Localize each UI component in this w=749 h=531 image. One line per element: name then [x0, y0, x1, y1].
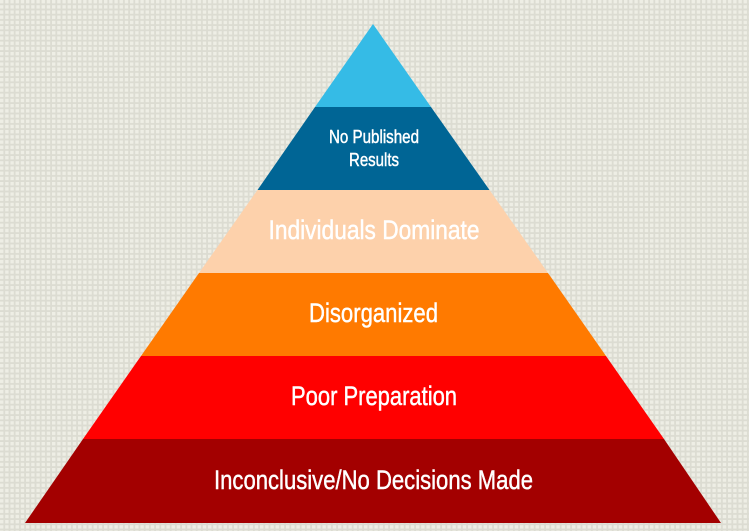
label: disorganized: Disorganized [309, 298, 438, 328]
label: no published results: Results [349, 150, 399, 170]
tier: inconclusive [25, 439, 721, 523]
tier: disorganized [141, 273, 606, 356]
label: poor preparation: Poor Preparation [291, 381, 457, 411]
tier: no published results [258, 107, 490, 190]
tier: poor preparation [83, 356, 664, 439]
tier: individuals dominate [199, 190, 548, 273]
label: inconclusive: Inconclusive/No Decisions Made [214, 465, 533, 495]
label: individuals dominate: Individuals Dominate [268, 215, 480, 245]
tier: top apex [315, 24, 431, 107]
label: no published results: No Published [329, 127, 419, 147]
